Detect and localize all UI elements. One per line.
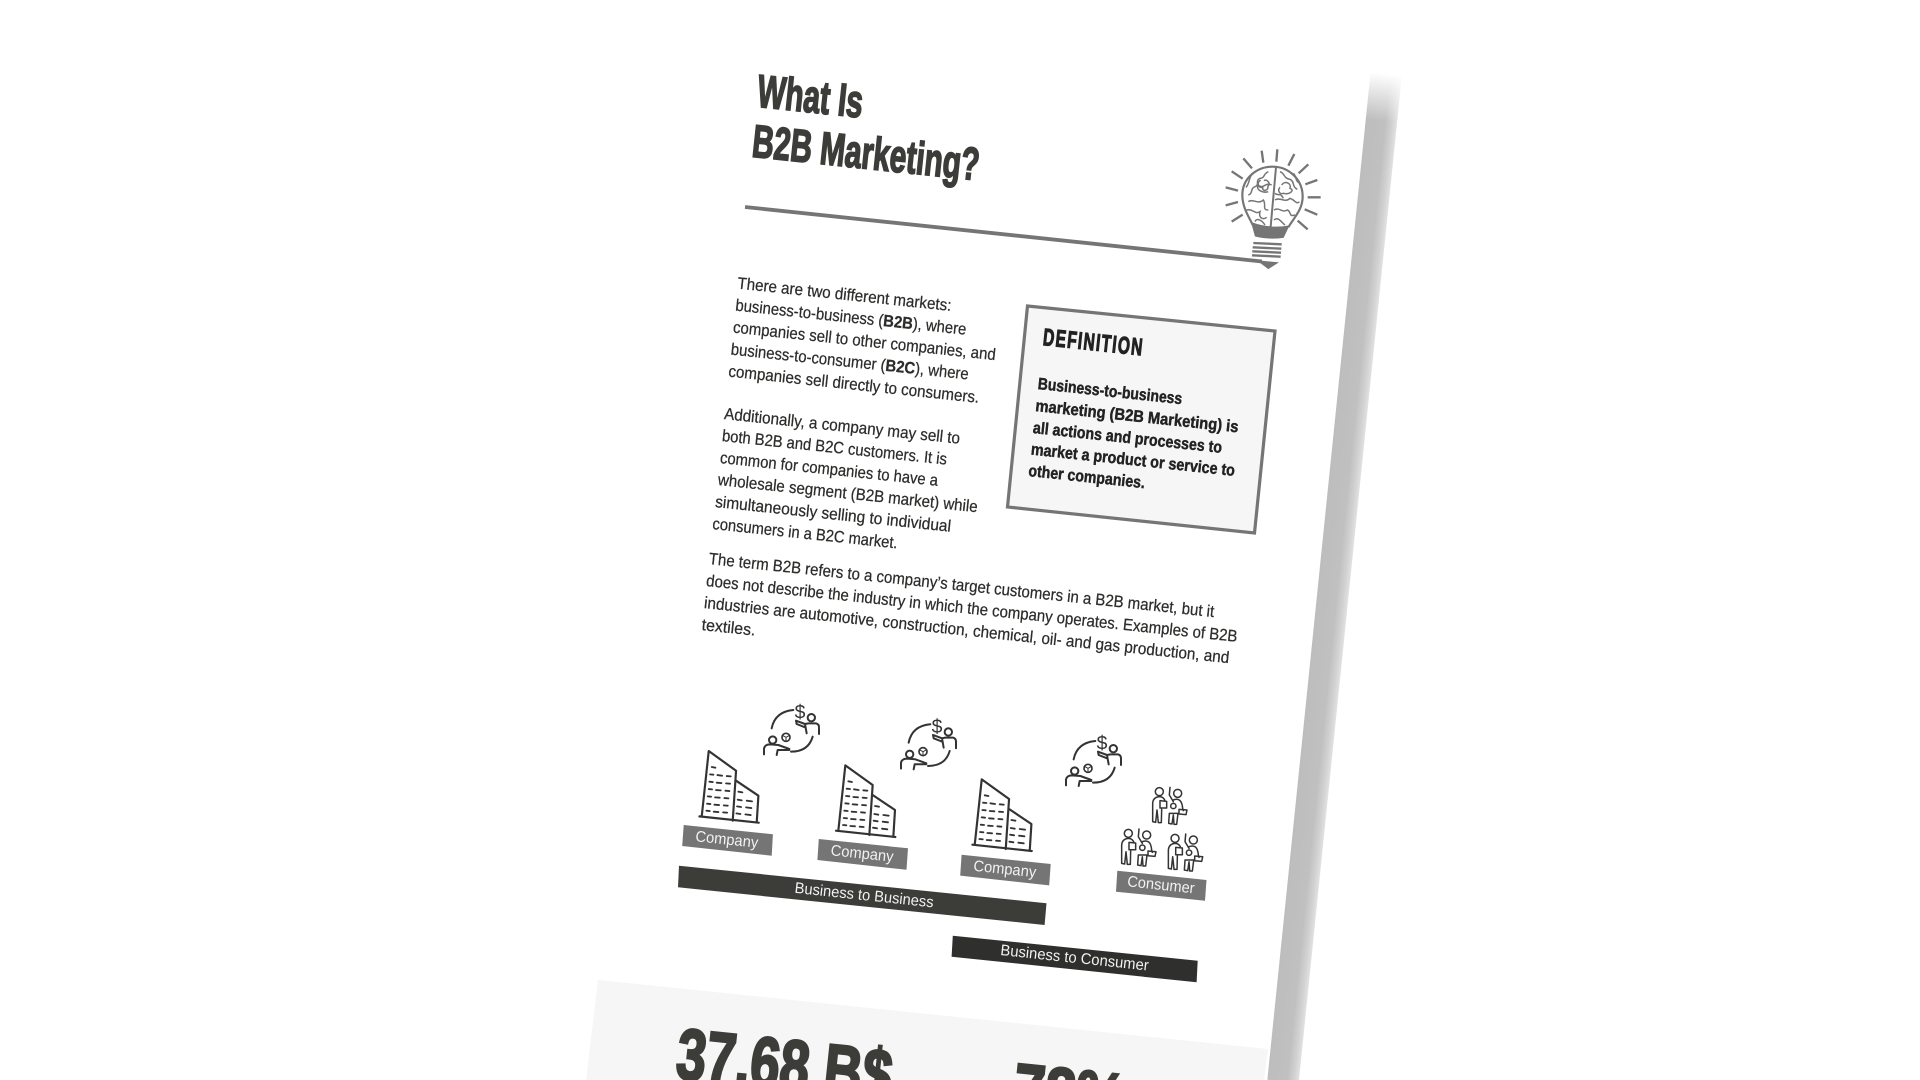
- icon: exchange 1: $: [795, 703, 806, 724]
- icon: exchange 1: [764, 703, 819, 755]
- icon: building 1: [699, 751, 759, 823]
- bar: business to consumer: [952, 936, 1198, 982]
- body text: the term B2B: industries are automotive, construction, chemical, oil- and gas production, and: [703, 594, 1230, 667]
- body text: two markets: business-to-consumer (B2C), where: [730, 341, 970, 383]
- icon: building 3: [972, 779, 1032, 851]
- body text: the term B2B: does not describe the industry in which the company operates. Examples of B2B: [705, 572, 1238, 646]
- label: company 3: [960, 855, 1051, 885]
- definition text: marketing (B2B Marketing) is: [1035, 397, 1239, 436]
- body text: two markets: companies sell to other companies, and: [732, 319, 997, 364]
- body text: selling to both: simultaneously selling to individual: [714, 493, 952, 536]
- label: company 1: Company: [695, 828, 759, 852]
- label: consumer: Consumer: [1126, 873, 1195, 897]
- icon: consumers: [1122, 787, 1203, 871]
- label: company 2: [817, 839, 908, 870]
- definition text: market a product or service to: [1030, 441, 1236, 480]
- icon: building 2: [836, 765, 895, 837]
- body text: two markets: business-to-business (B2B), where: [735, 297, 967, 339]
- icon: exchange 2: [901, 717, 956, 769]
- label: company 2: Company: [830, 842, 895, 866]
- label: company 3: Company: [973, 858, 1037, 881]
- title: B2B Marketing?: [750, 115, 982, 190]
- definition text: [1028, 375, 1239, 492]
- body text: two markets: companies sell directly to consumers.: [728, 363, 980, 407]
- consumer pair right: [1168, 834, 1203, 871]
- definition heading: DEFINITION: [1042, 324, 1145, 362]
- label: company 1: [682, 825, 773, 856]
- panel: definition: [1008, 306, 1275, 533]
- consumer pair left: [1122, 829, 1156, 866]
- definition text: Business-to-business: [1037, 375, 1183, 408]
- body text: the term B2B: The term B2B refers to a company’s target customers in a B2B market, but it: [708, 550, 1215, 621]
- bar: business to business: [678, 866, 1046, 925]
- body text: two markets: [728, 275, 997, 407]
- body text: selling to both: both B2B and B2C customers. It is: [721, 427, 948, 469]
- title rule: [745, 207, 1262, 262]
- icon: exchange 3: $: [1097, 734, 1108, 755]
- consumer pair top: [1153, 787, 1187, 824]
- body text: the term B2B: textiles.: [701, 616, 756, 640]
- body text: selling to both: Additionally, a company may sell to: [723, 405, 961, 448]
- body text: selling to both: [712, 405, 979, 552]
- body text: selling to both: consumers in a B2C market.: [712, 515, 898, 552]
- icon: exchange 3: [1066, 734, 1121, 786]
- page edge shadow: [1266, 72, 1403, 1080]
- title: What Is: [755, 65, 866, 128]
- body text: the term B2B: [701, 550, 1238, 667]
- bar: business to business: Business to Business: [794, 880, 935, 911]
- icon: lightbulb with brain: [1226, 149, 1321, 269]
- bar: business to consumer: Business to Consumer: [1000, 942, 1150, 975]
- stats panel background: [586, 980, 1268, 1080]
- icon: exchange 2: $: [932, 717, 943, 738]
- title: [750, 65, 982, 190]
- label: consumer: [1116, 871, 1206, 901]
- body text: selling to both: wholesale segment (B2B market) while: [716, 471, 979, 516]
- body text: selling to both: common for companies to have a: [719, 449, 940, 490]
- definition text: all actions and processes to: [1032, 419, 1223, 457]
- body text: two markets: There are two different markets:: [737, 275, 952, 315]
- definition text: other companies.: [1028, 462, 1146, 492]
